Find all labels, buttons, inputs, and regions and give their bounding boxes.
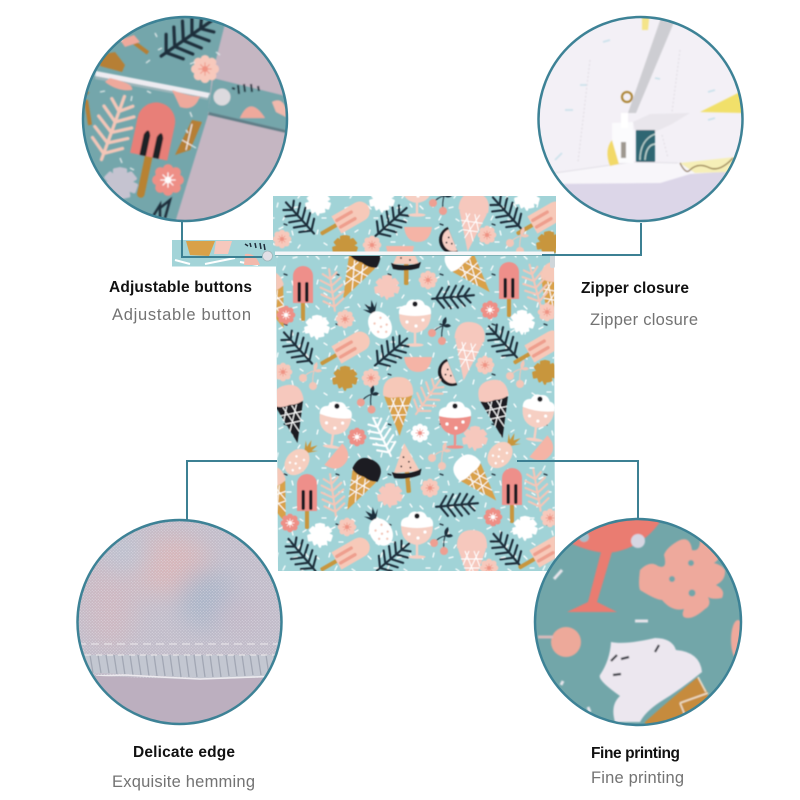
tab in close-up bbox=[208, 78, 290, 134]
circle outline bbox=[78, 520, 282, 724]
sprinkles bbox=[554, 570, 648, 712]
circle outline bbox=[538, 17, 742, 221]
zipper close-up bbox=[95, 71, 210, 98]
snap button bbox=[214, 88, 230, 106]
bag body bbox=[273, 196, 556, 571]
label: fine printing: Fine printing bbox=[591, 745, 680, 762]
popsicle close-up bbox=[130, 102, 176, 199]
sublabel: adjustable button: Adjustable button bbox=[112, 306, 251, 324]
surface behind the bag bbox=[175, 26, 285, 220]
label: delicate edge: Delicate edge bbox=[133, 744, 235, 761]
detail circle: fine printing bbox=[532, 510, 745, 730]
yellow print pieces bbox=[700, 92, 744, 113]
surface below the hem bbox=[94, 676, 264, 722]
zipper bbox=[275, 252, 555, 268]
monstera leaf close-up bbox=[639, 539, 725, 618]
print motifs bbox=[105, 78, 132, 90]
slider bbox=[612, 122, 632, 130]
soft slider highlight bbox=[634, 114, 686, 132]
circle outline bbox=[83, 17, 287, 221]
ice cream scoop close-up bbox=[600, 638, 702, 722]
label: zipper closure: Zipper closure bbox=[581, 280, 689, 297]
callout connector: zipper bbox=[542, 223, 641, 255]
folded hem bbox=[610, 162, 700, 174]
bag print pattern bbox=[273, 196, 556, 571]
label: adjustable buttons: Adjustable buttons bbox=[109, 279, 252, 296]
print: area above zipper bbox=[273, 196, 556, 254]
print: area below zipper bbox=[276, 256, 555, 571]
sublabel: exquisite hemming: Exquisite hemming bbox=[112, 773, 255, 791]
detail circle: adjustable button bbox=[82, 16, 288, 222]
mesh colour patches bbox=[91, 532, 233, 638]
stitched hem bbox=[78, 644, 282, 679]
product: wet bag bbox=[172, 196, 556, 571]
zipper tape bbox=[628, 20, 674, 114]
sublabel: zipper closure: Zipper closure bbox=[590, 311, 698, 329]
cherry close-up bbox=[551, 627, 581, 657]
circle outline bbox=[535, 519, 741, 725]
cocktail glass close-up bbox=[567, 510, 660, 612]
surface below the bag bbox=[564, 172, 726, 220]
callout connector: printing bbox=[517, 461, 638, 520]
callout connector: adjustable button bbox=[182, 222, 262, 257]
hanging tab with snap button bbox=[172, 240, 276, 266]
callout connector: edge bbox=[187, 461, 277, 520]
detail circle: delicate edge bbox=[75, 518, 285, 728]
teeth and fabric behind bbox=[612, 130, 634, 163]
sublabel: fine printing: Fine printing bbox=[591, 769, 684, 787]
ice cream cone close-up bbox=[645, 677, 708, 730]
detail circle: zipper closure bbox=[535, 10, 747, 225]
